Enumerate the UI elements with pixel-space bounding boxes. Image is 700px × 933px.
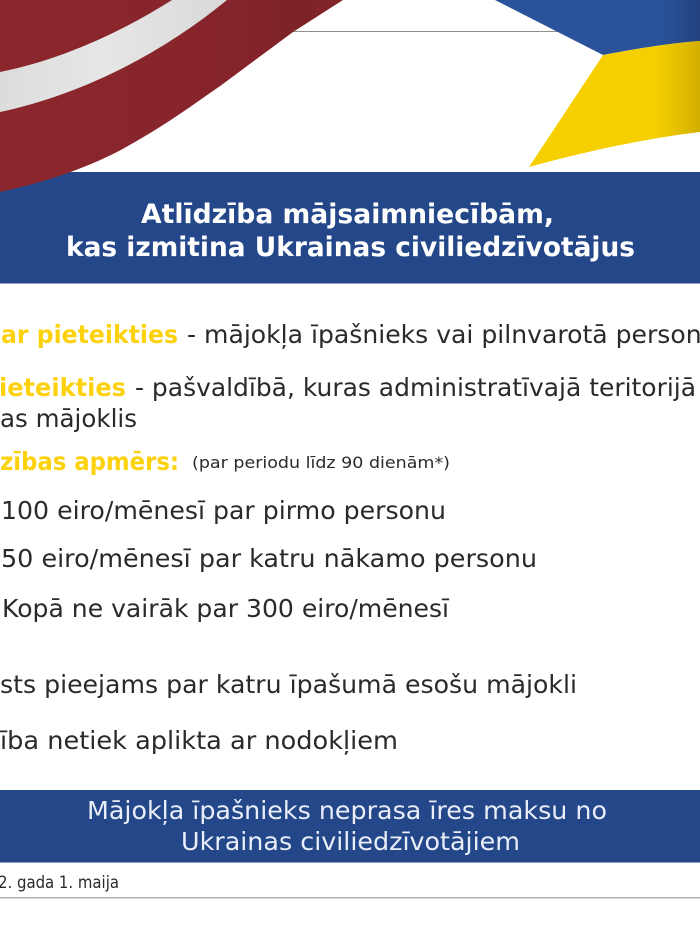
icon: Latvian flag ribbon — [0, 0, 343, 192]
list: amounts — [1, 496, 537, 623]
title: Atlīdzība mājsaimniecībām, — [141, 199, 554, 230]
panel: rent notice banner: Ukrainas civiliedzīvotājiem — [181, 827, 520, 856]
title — [66, 199, 635, 263]
title banner background — [0, 172, 700, 284]
text: amount heading: zības apmērs: — [0, 447, 179, 476]
icon: Ukrainian flag ribbon — [495, 0, 700, 167]
text: availability note: sts pieejams par katru īpašumā esošu mājokli — [0, 670, 577, 699]
panel: rent notice banner — [0, 790, 700, 862]
list: amounts: Kopā ne vairāk par 300 eiro/mēnesī — [2, 594, 450, 623]
text: amount heading: (par periodu līdz 90 dienām*) — [192, 453, 450, 472]
text: tax note: ība netiek aplikta ar nodokļiem — [0, 726, 398, 755]
text: who can apply: - mājokļa īpašnieks vai pilnvarotā persona — [187, 320, 700, 349]
text: where to apply: as mājoklis — [0, 404, 137, 433]
text: where to apply: - pašvaldībā, kuras administratīvajā teritorijā — [135, 373, 696, 402]
text: where to apply — [0, 373, 696, 433]
footnote date: 2. gada 1. maija — [0, 873, 119, 893]
text: amount heading — [0, 447, 450, 476]
title: kas izmitina Ukrainas civiliedzīvotājus — [66, 232, 635, 263]
text: where to apply: ieteikties — [0, 373, 126, 402]
list: amounts: 50 eiro/mēnesī par katru nākamo personu — [1, 544, 537, 573]
divider line at top — [290, 31, 560, 32]
text: who can apply: ar pieteikties — [1, 320, 178, 349]
list: amounts: 100 eiro/mēnesī par pirmo personu — [1, 496, 446, 525]
panel: rent notice banner: Mājokļa īpašnieks neprasa īres maksu no — [87, 796, 607, 825]
